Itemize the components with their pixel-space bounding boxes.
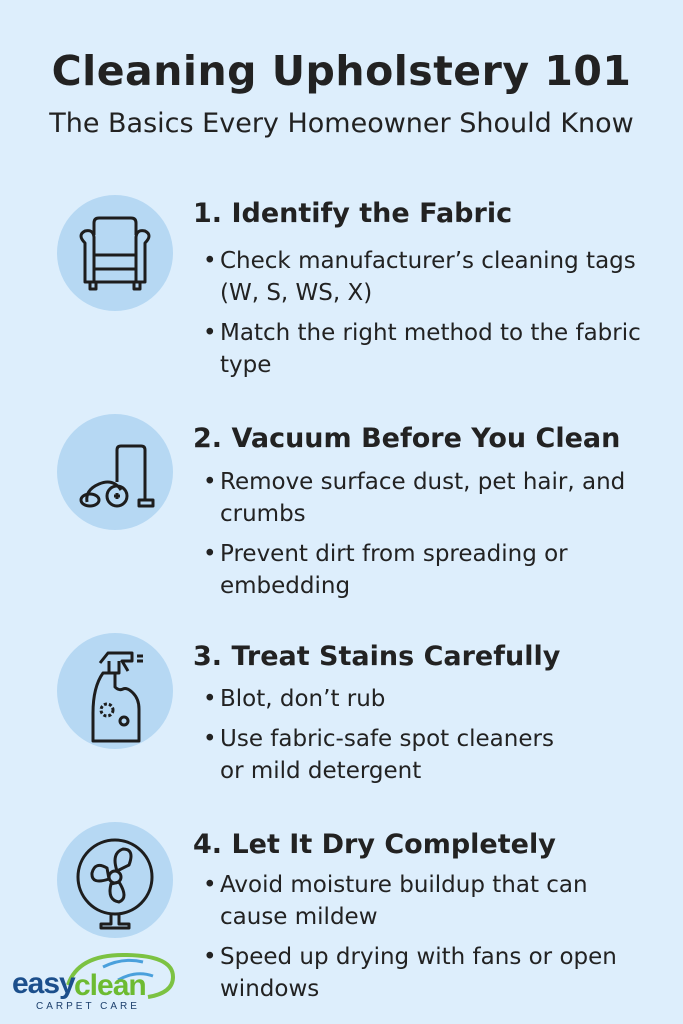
bullets 1: type [220, 352, 271, 378]
icon: vacuum [57, 414, 173, 530]
bullets 4: windows [220, 976, 319, 1002]
bullets 4: Speed up drying with fans or open [220, 944, 617, 970]
bullets 1: Check manufacturer’s cleaning tags [220, 248, 636, 274]
bullets 4 [206, 872, 617, 1002]
logo: easy clean carpet care [12, 953, 175, 1012]
bullets 3: Blot, don’t rub [220, 686, 385, 712]
heading 1: 1. Identify the Fabric [193, 198, 512, 229]
bullets 1: Match the right method to the fabric [220, 320, 641, 346]
logo: easy clean carpet care: CARPET CARE [36, 1001, 140, 1012]
logo: easy clean carpet care: clean [74, 969, 146, 1002]
bullets 3: or mild detergent [220, 758, 421, 784]
bullets 4: cause mildew [220, 904, 378, 930]
icon: fan [57, 822, 173, 938]
heading 2: 2. Vacuum Before You Clean [193, 423, 620, 454]
bullets 1: (W, S, WS, X) [220, 280, 372, 306]
bullets 3 [206, 686, 554, 784]
bullets 3: Use fabric-safe spot cleaners [220, 726, 554, 752]
title: Cleaning Upholstery 101 [52, 47, 631, 95]
bullets 2 [206, 469, 625, 599]
bullets 4: Avoid moisture buildup that can [220, 872, 588, 898]
icon: armchair [57, 195, 173, 311]
logo: easy clean carpet care: easy [12, 967, 76, 1000]
bullets 2: embedding [220, 573, 350, 599]
bullets 2: Remove surface dust, pet hair, and [220, 469, 625, 495]
icon: spray bottle [57, 633, 173, 749]
heading 4: 4. Let It Dry Completely [193, 829, 556, 860]
bullets 2: crumbs [220, 501, 306, 527]
bullets 1 [206, 248, 641, 378]
heading 3: 3. Treat Stains Carefully [193, 641, 560, 672]
bullets 2: Prevent dirt from spreading or [220, 541, 568, 567]
subtitle: The Basics Every Homeowner Should Know [49, 108, 634, 139]
